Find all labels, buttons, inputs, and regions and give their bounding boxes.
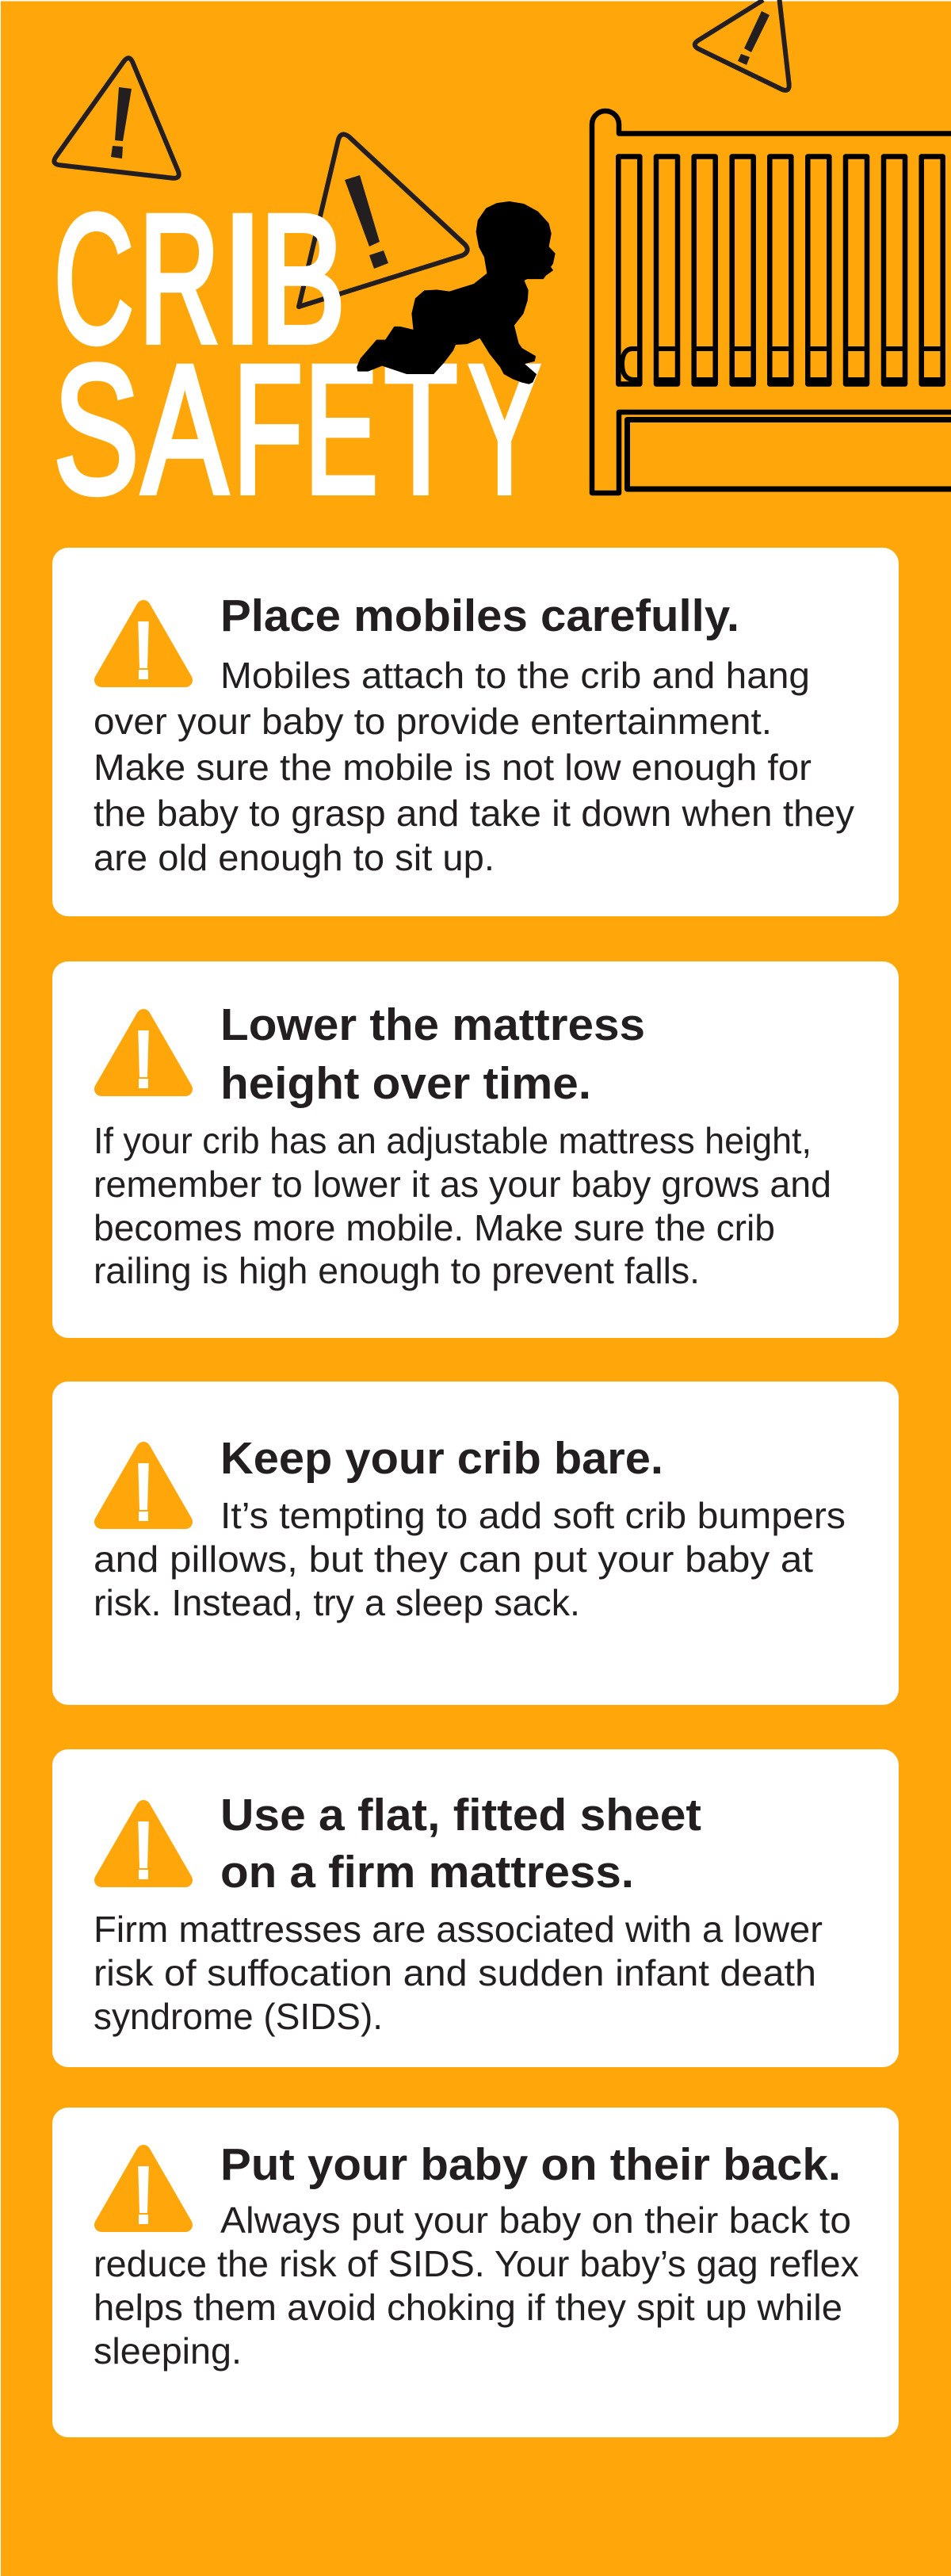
heading: Keep your crib bare. — [220, 1433, 663, 1484]
illustration: crib — [592, 111, 951, 493]
title — [54, 177, 540, 531]
icon: warning triangle behind title — [299, 135, 468, 307]
panel: put your baby on their back — [52, 2108, 899, 2437]
title: Y — [468, 327, 540, 531]
body text: and pillows, but they can put your baby at — [94, 1538, 813, 1580]
title: S — [54, 327, 139, 531]
title: E — [305, 327, 378, 531]
body text: helps them avoid choking if they spit up while — [94, 2287, 842, 2328]
icon: warning triangle top left — [54, 58, 179, 178]
body text: Firm mattresses are associated with a lower — [94, 1909, 823, 1950]
body text: Always put your baby on their back to — [220, 2200, 851, 2241]
panel: place mobiles carefully — [52, 548, 899, 916]
icon: crawling baby silhouette — [357, 202, 555, 384]
heading: Use a flat, fitted sheet — [220, 1790, 701, 1840]
panel: flat fitted sheet on firm mattress — [52, 1749, 899, 2067]
body text: risk. Instead, try a sleep sack. — [94, 1582, 580, 1623]
body text: Make sure the mobile is not low enough for — [94, 747, 812, 788]
body text: the baby to grasp and take it down when they — [94, 793, 854, 834]
body text: are old enough to sit up. — [94, 837, 495, 878]
heading: height over time. — [220, 1058, 591, 1109]
title: I — [221, 177, 264, 380]
body text: Mobiles attach to the crib and hang — [220, 655, 810, 696]
body text: railing is high enough to prevent falls. — [94, 1250, 700, 1291]
heading — [220, 999, 645, 1109]
heading: on a firm mattress. — [220, 1847, 634, 1898]
body text — [94, 655, 854, 878]
body text: risk of suffocation and sudden infant death — [94, 1952, 816, 1993]
title: T — [384, 327, 457, 531]
body text — [94, 1120, 831, 1291]
title: F — [233, 327, 303, 531]
heading: Lower the mattress — [220, 999, 645, 1050]
icon: warning sign — [101, 2152, 185, 2225]
heading: Put your baby on their back. — [220, 2139, 841, 2190]
title: R — [139, 177, 220, 380]
body text — [94, 1495, 846, 1623]
body text — [94, 1909, 823, 2037]
title: C — [54, 177, 133, 380]
icon: warning triangle top right — [695, 0, 789, 90]
body text: over your baby to provide entertainment. — [94, 701, 772, 742]
body text: becomes more mobile. Make sure the crib — [94, 1207, 775, 1248]
body text: reduce the risk of SIDS. Your baby’s gag reflex — [94, 2243, 859, 2284]
icon: warning sign — [101, 607, 185, 680]
body text: remember to lower it as your baby grows and — [94, 1164, 831, 1205]
icon: warning sign — [101, 1807, 185, 1880]
panel: keep your crib bare — [52, 1382, 899, 1705]
body text: It’s tempting to add soft crib bumpers — [220, 1495, 846, 1536]
heading — [220, 1790, 701, 1898]
mattress — [628, 420, 951, 489]
body text: If your crib has an adjustable mattress height, — [94, 1120, 812, 1161]
icon: warning sign — [101, 1016, 185, 1089]
icon: warning sign — [101, 1449, 185, 1522]
panel: lower the mattress height — [52, 961, 899, 1338]
body text — [94, 2200, 859, 2372]
body text: sleeping. — [94, 2330, 242, 2372]
body text: syndrome (SIDS). — [94, 1996, 383, 2037]
title: A — [142, 327, 227, 531]
crib slats — [618, 157, 943, 384]
title: B — [260, 177, 346, 380]
heading: Place mobiles carefully. — [220, 590, 739, 641]
